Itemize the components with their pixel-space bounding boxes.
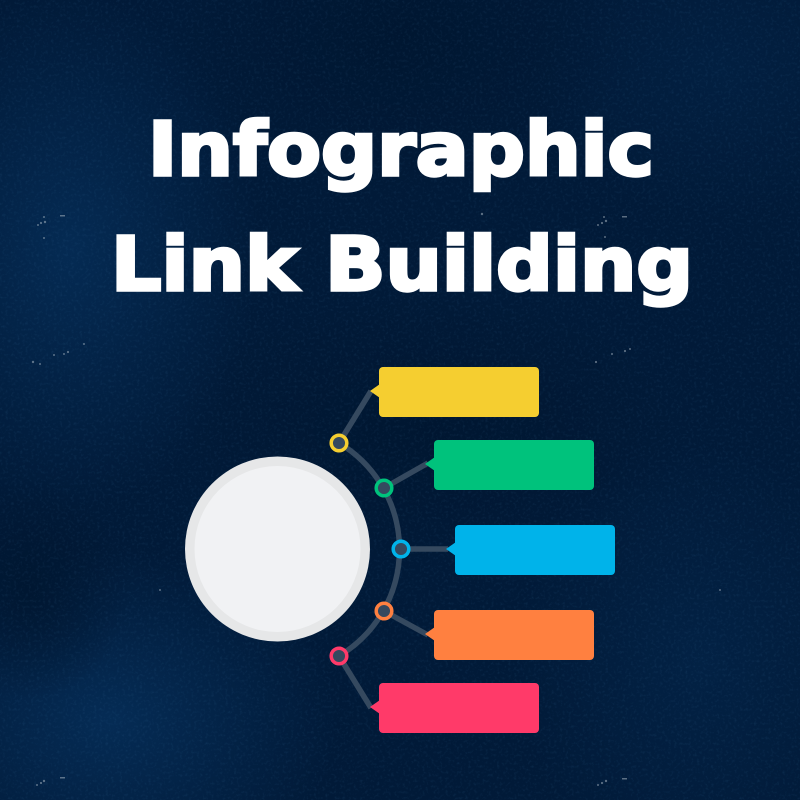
central circle — [185, 456, 370, 642]
callout: green — [425, 440, 594, 490]
title line 1: Infographic — [148, 107, 654, 193]
connector lines — [339, 391, 448, 708]
node: green — [376, 480, 392, 496]
node: orange — [376, 603, 392, 619]
callout: blue — [446, 525, 615, 575]
node: pink — [331, 648, 347, 664]
callout: pink — [370, 683, 539, 733]
node: blue — [393, 541, 409, 557]
callout: orange — [425, 610, 594, 660]
title line 2: Link Building — [111, 222, 693, 308]
callout: yellow — [370, 367, 539, 417]
title — [111, 107, 693, 308]
node: yellow — [331, 435, 347, 451]
